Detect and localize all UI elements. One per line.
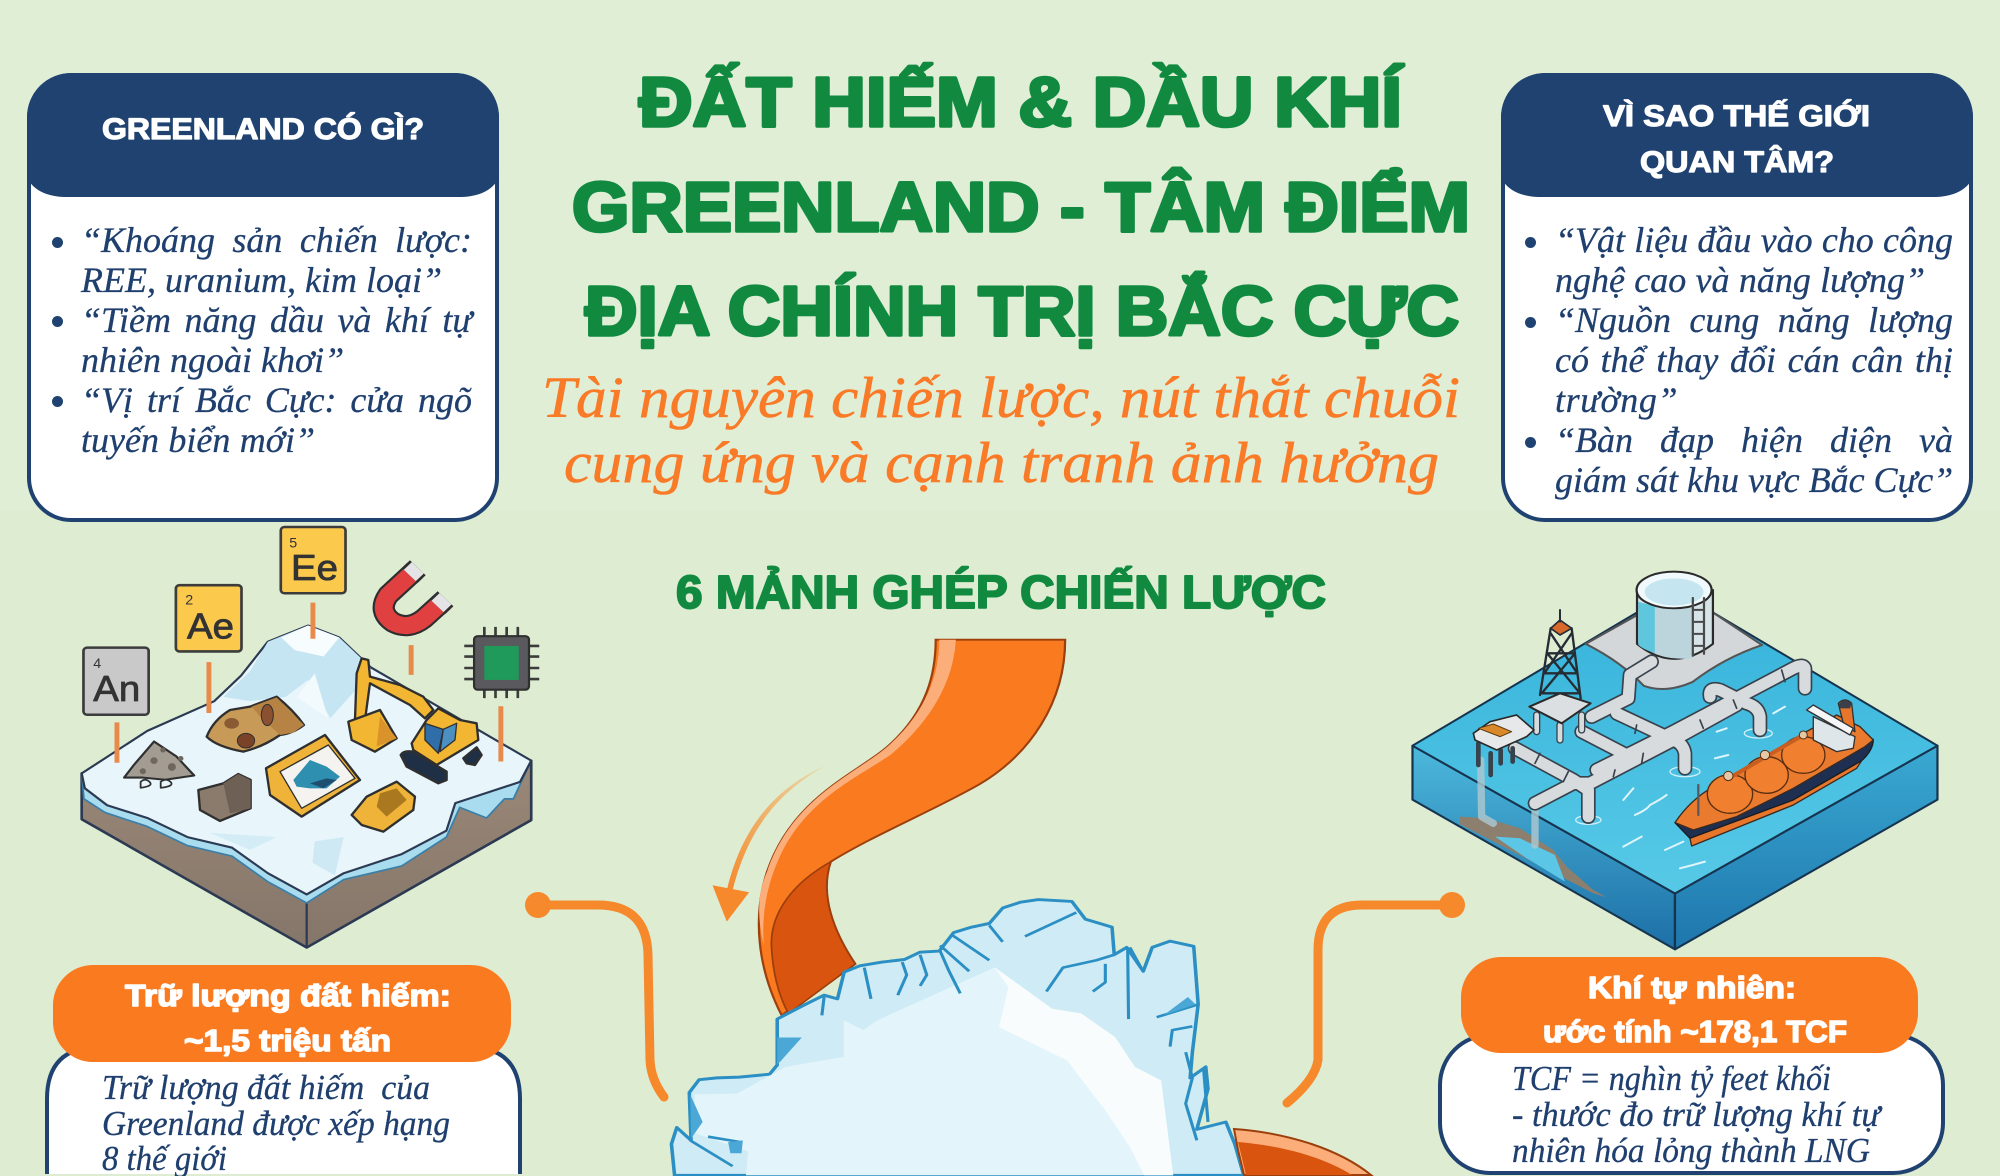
main title: ĐỊA CHÍNH TRỊ BẮC CỰC [585, 271, 1459, 350]
callout: khí tự nhiên [1438, 957, 1945, 1175]
element card Ae: Ae [187, 605, 234, 646]
water block [1412, 590, 1937, 949]
callout body: nhiên hóa lỏng thành LNG [1512, 1131, 1870, 1170]
ice band edge [82, 761, 531, 903]
callout: trữ lượng đất hiếm [45, 965, 522, 1176]
bullet list: Greenland có gì: tuyến biển mới” [81, 420, 315, 460]
icon: magnet [384, 568, 446, 626]
lower background tint [0, 510, 2000, 1176]
subtitle [542, 365, 1460, 495]
ripples [1576, 729, 1772, 824]
element card An [83, 648, 149, 715]
arrow: small curved arrow [712, 765, 826, 922]
ice top surface with mountain [82, 626, 531, 894]
bullet list: Vì sao thế giới quan tâm: có thể thay đổi cán cân thị [1555, 340, 1953, 380]
bullet list: Vì sao thế giới quan tâm: nghệ cao và năng lượng” [1555, 260, 1925, 300]
callout body [47, 1047, 520, 1176]
block soil sides [82, 761, 531, 948]
bullet list: Greenland có gì: nhiên ngoài khơi” [81, 340, 344, 380]
panel: Greenland có gì [27, 73, 499, 522]
callout body: Greenland được xếp hạng [102, 1104, 450, 1143]
panel header: Vì sao thế giới quan tâm: VÌ SAO THẾ GIỚI [1603, 99, 1870, 133]
bullet list: Greenland có gì: “Tiềm năng dầu và khí tự [81, 300, 472, 340]
callout body [1440, 1035, 1943, 1173]
subtitle: cung ứng và cạnh tranh ảnh hưởng [564, 430, 1439, 495]
drilling rig [1529, 610, 1591, 740]
wave marks [1623, 707, 1785, 868]
main title: GREENLAND - TÂM ĐIỂM [572, 167, 1470, 246]
arrow: large orange ribbon [759, 640, 1065, 1015]
callout body: TCF = nghìn tỷ feet khối [1512, 1059, 1831, 1098]
section heading: 6 mảnh ghép chiến lược: 6 MẢNH GHÉP CHIẾN LƯỢC [676, 566, 1326, 618]
element cards, pins and icons [83, 527, 539, 763]
offshore detail layer [1460, 610, 1873, 897]
element card Ae: 2 [185, 592, 193, 607]
pipeline network [1515, 662, 1805, 817]
icon: microchip [464, 627, 539, 698]
panel header: Greenland có gì: GREENLAND CÓ GÌ? [102, 112, 424, 146]
element card Ee: 5 [289, 535, 297, 550]
element card An: 4 [93, 655, 101, 671]
callout pill: ước tính ~178,1 TCF [1543, 1014, 1847, 1049]
strategic central map: iceberg with orange arrows [670, 638, 1374, 1176]
callout body: - thước đo trữ lượng khí tự [1512, 1095, 1883, 1134]
element card Ee: Ee [291, 547, 338, 588]
mining equipment and ore detail [198, 658, 482, 832]
callout pill [53, 965, 511, 1062]
mountain shading [210, 626, 371, 875]
subtitle: Tài nguyên chiến lược, nút thắt chuỗi [542, 365, 1460, 430]
connector pins [117, 603, 501, 763]
LNG carrier [1675, 700, 1873, 846]
excavator machine [348, 658, 482, 783]
callout pill: Khí tự nhiên: [1588, 970, 1796, 1005]
bullet list: Greenland có gì: “Khoáng sản chiến lược: [81, 220, 472, 260]
concrete pad [1586, 614, 1762, 689]
illustration: rare earth isometric block [80, 526, 540, 949]
main title: ĐẤT HIẾM & DẦU KHÍ [639, 63, 1404, 141]
small mining vehicle [352, 782, 415, 832]
illustration: offshore gas and LNG block [1411, 570, 1939, 950]
dark rock [198, 774, 251, 821]
connector: right orange line [1282, 892, 1465, 1108]
callout pill: Trữ lượng đất hiếm: [125, 978, 451, 1013]
storage tank [1637, 572, 1713, 659]
connector: left orange line [525, 892, 668, 1102]
element card Ee [281, 527, 346, 593]
seabed [1460, 760, 1607, 897]
small platform [1473, 715, 1534, 775]
panel header: Greenland có gì [27, 73, 499, 197]
callout pill [1461, 957, 1918, 1053]
bullet list: Greenland có gì: REE, uranium, kim loại” [81, 260, 442, 300]
panel header: Vì sao thế giới quan tâm: QUAN TÂM? [1640, 145, 1834, 179]
map sign [266, 735, 360, 817]
callout body: Trữ lượng đất hiếm của [102, 1068, 430, 1107]
arrow: lower right ribbon [1234, 1129, 1371, 1175]
panel: Vì sao thế giới quan tâm [1501, 73, 1973, 522]
callout pill: ~1,5 triệu tấn [184, 1023, 391, 1058]
brown ore rock [207, 697, 304, 752]
bullet list: Greenland có gì: “Vị trí Bắc Cực: cửa ngõ [81, 380, 472, 420]
element card Ae [176, 585, 242, 651]
bullet list: Vì sao thế giới quan tâm: “Vật liệu đầu vào cho công [1555, 220, 1953, 260]
iceberg [671, 900, 1244, 1175]
bullet list: Vì sao thế giới quan tâm: trường” [1555, 380, 1678, 420]
bullet list: Vì sao thế giới quan tâm: giám sát khu vực Bắc Cực” [1555, 460, 1953, 500]
element card An: An [93, 668, 140, 709]
ice crevasse fills [690, 997, 1196, 1153]
bullet list: Vì sao thế giới quan tâm: “Nguồn cung năng lượng [1555, 300, 1953, 340]
main title [572, 62, 1470, 350]
bullet list: Vì sao thế giới quan tâm [1525, 220, 1953, 500]
ice cracks [690, 912, 1208, 1166]
bullet list: Vì sao thế giới quan tâm: “Bàn đạp hiện diện và [1555, 420, 1953, 460]
bullet list: Greenland có gì [52, 220, 474, 460]
panel header: Vì sao thế giới quan tâm [1501, 73, 1973, 197]
grey ore pile [124, 742, 194, 788]
